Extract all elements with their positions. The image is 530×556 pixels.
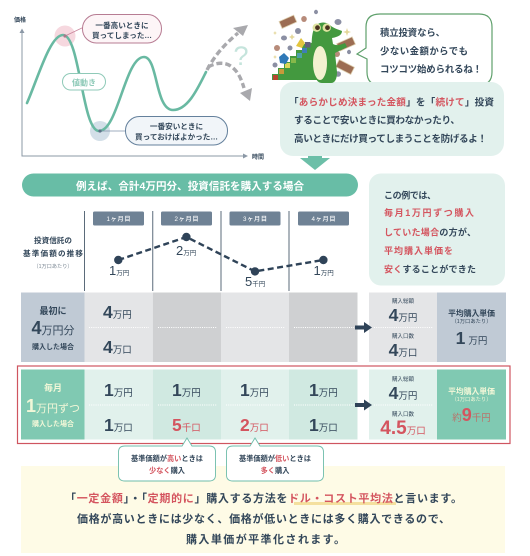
table row: monthly [21, 370, 506, 440]
label: fluctuation: 値動き [72, 78, 96, 88]
arrow: row 1 result [355, 322, 372, 333]
total [389, 297, 417, 360]
values: 1万円 [309, 380, 338, 400]
panel: explanation [280, 82, 504, 156]
total: 購入口数 [392, 332, 414, 340]
average price: 約9千円 [452, 405, 491, 425]
speech bubble: crocodile [357, 14, 492, 85]
row label [26, 382, 80, 428]
row label: 1万円ずつ [26, 396, 80, 416]
panel: explanation: 「あらかじめ決まった金額」を「続けて」投資 [289, 96, 494, 108]
month columns [84, 211, 349, 291]
average price: 平均購入単価 [448, 308, 495, 318]
panel: summary [21, 466, 505, 553]
average price: （1万口あたり） [451, 396, 492, 403]
row label: 最初に [39, 305, 67, 316]
chart axes [22, 32, 243, 156]
average price [448, 308, 495, 348]
panel: summary: 価格が高いときには少なく、価格が低いときには多く購入できるので、 [77, 512, 450, 526]
callout: bought at highest: 買ってしまった… [92, 30, 152, 40]
average price: 1 万円 [456, 328, 487, 348]
sparkles [273, 28, 351, 59]
month tag: 3: 3ヶ月目 [243, 216, 267, 223]
panel: explanation: 高いときにだけ買ってしまうことを防げるよ！ [294, 133, 487, 145]
total [380, 375, 426, 439]
arrow: row 2 result [355, 400, 372, 410]
values: 1万円 [104, 380, 133, 400]
values: 1万円 [172, 380, 201, 400]
heading bar: 例えば、合計4万円分、投資信託を購入する場合 [76, 180, 304, 192]
NAV line chart [109, 233, 334, 289]
callout: bought at highest [63, 14, 162, 43]
row label [31, 305, 75, 351]
coins [272, 10, 351, 77]
callout: high price: 少なく購入 [149, 466, 185, 475]
average price [448, 386, 495, 425]
callout: low price: 多く購入 [261, 466, 289, 475]
row label: NAV trend: 投資信託の [34, 235, 72, 245]
crocodile belly [313, 46, 327, 80]
value: 1 man-en: 1万円 [314, 263, 334, 278]
month tag: 2 [161, 212, 212, 226]
row label: 毎月 [44, 382, 62, 393]
illustration: crocodile with coins [272, 10, 355, 83]
month tag: 1 [93, 212, 144, 226]
crocodile eyes [312, 24, 331, 32]
value: 5 sen-en: 5千円 [245, 274, 265, 289]
panel: conclusion [369, 174, 505, 286]
speech bubble: crocodile: 少ない金額からでも [380, 46, 468, 56]
heading bar [22, 174, 358, 196]
panel: conclusion: 平均購入単価を [384, 245, 453, 256]
table row: lump sum [21, 292, 506, 362]
speech bubble: crocodile: 積立投資なら、 [380, 27, 445, 38]
total: 4万円 [389, 383, 417, 403]
panel: conclusion: 安くすることができた [384, 264, 476, 274]
arrow: down [300, 156, 330, 170]
total: 購入口数 [392, 410, 414, 418]
label: fluctuation [62, 74, 106, 90]
stairs [272, 42, 320, 80]
question mark: ? [233, 41, 249, 71]
dashed arrow: price up [207, 25, 248, 70]
values: 5千口 [172, 415, 201, 435]
crocodile body [312, 23, 347, 83]
axis label: price: 価格 [14, 16, 26, 24]
callout: should have bought at lowest [98, 116, 228, 145]
dashed arrow: price down [208, 63, 252, 101]
table row: lump sum: 4万口 [103, 337, 132, 357]
average price: 平均購入単価 [448, 386, 495, 396]
speech bubble: crocodile: コツコツ始められるね！ [380, 64, 482, 74]
month tag: 2: 2ヶ月目 [174, 216, 198, 223]
highlight: high point [54, 26, 76, 46]
row label: 購入した場合 [32, 419, 74, 428]
row label: 購入した場合 [32, 342, 74, 351]
month tag: 4 [298, 212, 349, 226]
values: 4万円 [103, 302, 132, 322]
values: 1万口 [104, 415, 133, 435]
price curve [27, 35, 206, 131]
gems [279, 53, 289, 64]
total: 購入総額 [392, 297, 414, 305]
axis label: time: 時間 [252, 153, 264, 161]
value: 2 man-en: 2万円 [176, 243, 196, 258]
month tag: 1: 1ヶ月目 [106, 216, 130, 223]
total: 4.5万口 [380, 418, 426, 439]
highlight frame [18, 366, 510, 444]
total: 4万口 [389, 340, 417, 360]
panel: conclusion: 毎月1万円ずつ購入 [384, 207, 474, 218]
highlight: low point [90, 121, 110, 141]
average price: （1万口あたり） [451, 318, 492, 325]
total: 4万円 [389, 305, 417, 325]
panel: conclusion: していた場合の方が、 [384, 226, 476, 238]
values: 2万口 [240, 415, 269, 435]
row label: NAV trend: 基準価額の推移 [23, 248, 83, 258]
panel: summary: 「一定金額」・「定期的に」購入する方法をドル・コスト平均法と言います。 [65, 491, 462, 505]
values: 1万円 [240, 380, 269, 400]
panel: summary: 購入単価が平準化されます。 [186, 532, 345, 546]
panel: explanation: することで安いときに買わなかったり、 [294, 114, 460, 126]
banknotes [279, 15, 355, 74]
callout: should have bought at lowest: 一番安いときに [150, 121, 203, 131]
row label: 4万円分 [31, 318, 75, 338]
callout: low price [226, 438, 324, 481]
month tag: 4: 4ヶ月目 [312, 216, 336, 223]
callout: high price: 基準価額が高いときは [131, 454, 203, 463]
callout: high price [118, 438, 216, 481]
month tag: 3 [230, 212, 280, 226]
panel: conclusion: この例では、 [384, 190, 436, 200]
row label: NAV trend: （1万口あたり） [33, 263, 73, 270]
row label: NAV trend [23, 235, 83, 270]
callout: low price: 基準価額が低いときは [239, 454, 311, 463]
price line chart [14, 14, 264, 161]
values: 1万口 [309, 415, 338, 435]
values [104, 380, 338, 435]
value: 1 man-en: 1万円 [109, 263, 129, 278]
callout: bought at highest: 一番高いときに [95, 20, 149, 30]
total: 購入総額 [392, 375, 414, 383]
callout: should have bought at lowest: 買っておけばよかった… [135, 132, 218, 142]
